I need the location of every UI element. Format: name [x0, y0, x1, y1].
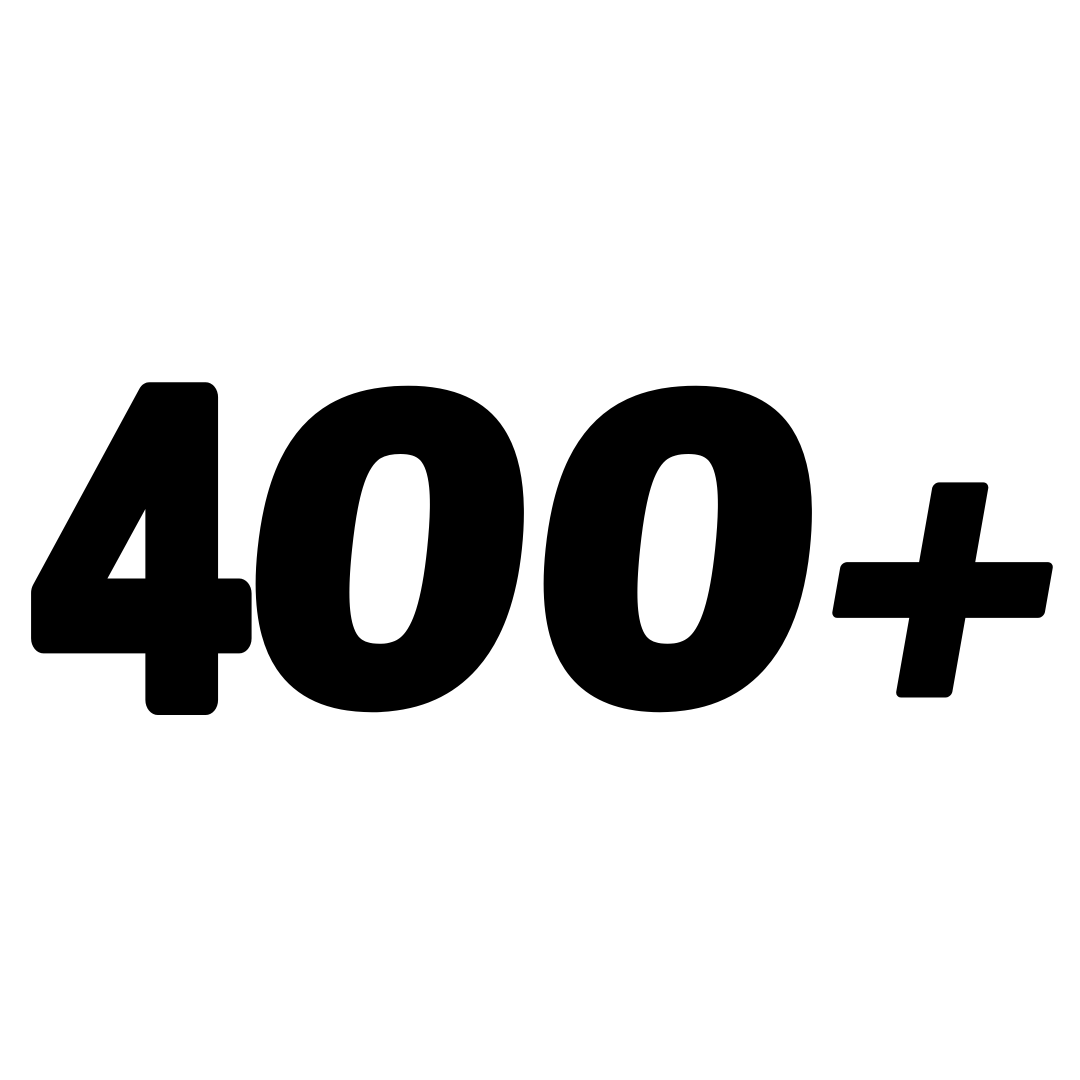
digit 4: 4 [38, 302, 243, 794]
title: 400+ [38, 302, 1080, 808]
first digit 0: 0 [225, 309, 555, 789]
second digit 0: 0 [513, 309, 843, 789]
